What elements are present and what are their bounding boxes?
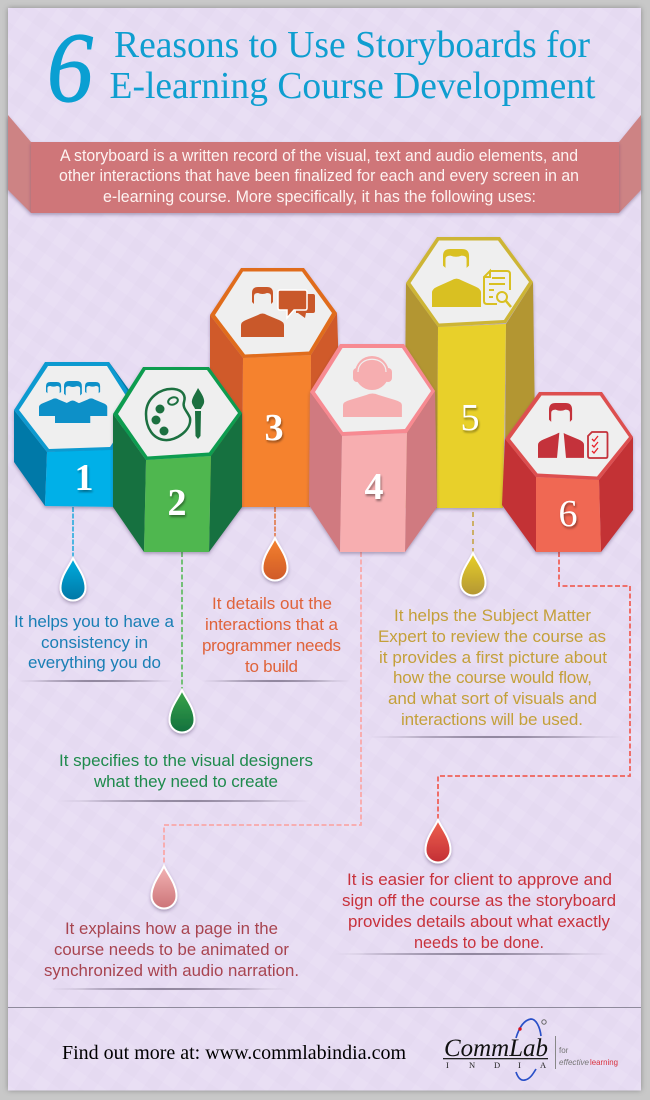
- text block 1: everything you do: [28, 653, 161, 672]
- ribbon right fold: [619, 115, 641, 213]
- connector: step 3: [274, 507, 276, 538]
- text block 3: It details out the: [212, 594, 332, 613]
- footer link text: Find out more at: www.commlabindia.com: [62, 1042, 406, 1064]
- hexagon 5: [404, 237, 535, 508]
- icon: person with document review: [432, 249, 511, 307]
- logo India letters: INDIA: [446, 1060, 547, 1070]
- connector: step 2: [181, 552, 183, 690]
- ribbon text: e-learning course. More specifically, it has the following uses:: [103, 187, 536, 206]
- text block 5: interactions will be used.: [401, 710, 583, 729]
- connector: step 1: [72, 507, 74, 560]
- ribbon text: [59, 146, 579, 206]
- text block 4: course needs to be animated or: [54, 940, 289, 959]
- logo orbit arcs: [516, 1019, 541, 1080]
- logo red dot: [518, 1027, 522, 1031]
- icon: person with checklist: [538, 403, 608, 458]
- intro ribbon: [8, 115, 641, 213]
- logo separator: [555, 1036, 556, 1069]
- hexagon 3 top face: [210, 268, 337, 358]
- hexagon 2: [113, 367, 242, 552]
- text block 5: how the course would flow,: [393, 668, 592, 687]
- text block 6: needs to be done.: [414, 933, 544, 952]
- text rule 4: [46, 988, 290, 990]
- icon: person with speech bubbles: [241, 287, 315, 337]
- hexagon 3: [210, 268, 340, 507]
- drop 6: [426, 820, 450, 862]
- text block 5: It helps the Subject Matter: [394, 606, 591, 625]
- hexagon 2 top face: [113, 367, 242, 460]
- logo registered mark: [542, 1020, 546, 1024]
- hexagon 1 top face: [14, 362, 140, 452]
- connector: step 6: [438, 552, 630, 821]
- number 4: 4: [364, 466, 384, 508]
- big numeral 6: 6: [47, 12, 93, 123]
- text block 2: It specifies to the visual designers: [59, 751, 313, 770]
- text rule 3: [200, 680, 352, 682]
- logo tagline: for: [559, 1046, 569, 1055]
- hexagon 6 top face: [505, 392, 633, 480]
- hexagon 4 top face: [310, 344, 435, 436]
- text block 6: It is easier for client to approve and: [347, 870, 612, 889]
- hexagon 6: [502, 392, 633, 552]
- number 2: 2: [168, 482, 186, 524]
- ribbon text: other interactions that have been finalized for each and every screen in an: [59, 166, 579, 185]
- text block 3: to build: [245, 657, 298, 676]
- number 3: 3: [264, 407, 284, 449]
- hexagon 1: [14, 362, 142, 507]
- number 1: 1: [74, 457, 94, 499]
- ribbon band: [31, 142, 619, 213]
- text block 5: [378, 606, 607, 729]
- text block 5: and what sort of visuals and: [388, 689, 597, 708]
- text rule 2: [55, 800, 315, 802]
- text block 3: programmer needs: [202, 636, 341, 655]
- icon: team: [39, 381, 107, 423]
- footer divider: [8, 1007, 641, 1008]
- title line 1: Reasons to Use Storyboards for: [114, 24, 590, 66]
- text block 2: what they need to create: [93, 772, 278, 791]
- text block 4: It explains how a page in the: [65, 919, 278, 938]
- text block 4: [44, 919, 299, 980]
- drop 2: [170, 690, 194, 732]
- ribbon left fold: [8, 115, 31, 213]
- ribbon text: A storyboard is a written record of the visual, text and audio elements, and: [60, 146, 578, 165]
- logo underline: [443, 1058, 548, 1059]
- text block 4: synchronized with audio narration.: [44, 961, 299, 980]
- logo tagline: effective: [559, 1058, 590, 1067]
- title: [47, 12, 596, 123]
- text rule 1: [16, 680, 176, 682]
- text rule 5: [365, 736, 625, 738]
- logo tagline: learning: [590, 1058, 618, 1067]
- title line 2: E-learning Course Development: [110, 65, 596, 107]
- text block 1: consistency in: [41, 633, 148, 652]
- text block 6: provides details about what exactly: [348, 912, 610, 931]
- drop 5: [460, 553, 486, 596]
- logo tagline: [559, 1046, 618, 1067]
- drop 4: [152, 866, 176, 908]
- connector: step 5: [472, 512, 474, 553]
- hexagon 5 top face: [406, 237, 533, 327]
- number 6: 6: [558, 493, 578, 535]
- drop 1: [60, 558, 86, 600]
- text block 5: Expert to review the course as: [378, 627, 606, 646]
- logo wordmark: CommLab: [444, 1035, 548, 1062]
- number 5: 5: [460, 397, 480, 439]
- text block 1: It helps you to have a: [14, 612, 175, 631]
- text block 5: it provides a first picture about: [379, 648, 607, 667]
- icon: palette and brush: [146, 388, 204, 440]
- hexagon 4: [309, 344, 437, 552]
- text block 3: [202, 594, 341, 676]
- text block 1: [14, 612, 175, 672]
- CommLab India logo: [443, 1019, 618, 1080]
- text rule 6: [332, 953, 614, 955]
- drop 3: [262, 538, 288, 580]
- text block 6: sign off the course as the storyboard: [342, 891, 616, 910]
- text block 6: [342, 870, 616, 952]
- text block 3: interactions that a: [205, 615, 339, 634]
- connector: step 4: [164, 552, 361, 866]
- text block 2: [59, 751, 313, 791]
- icon: person with headset: [343, 356, 402, 417]
